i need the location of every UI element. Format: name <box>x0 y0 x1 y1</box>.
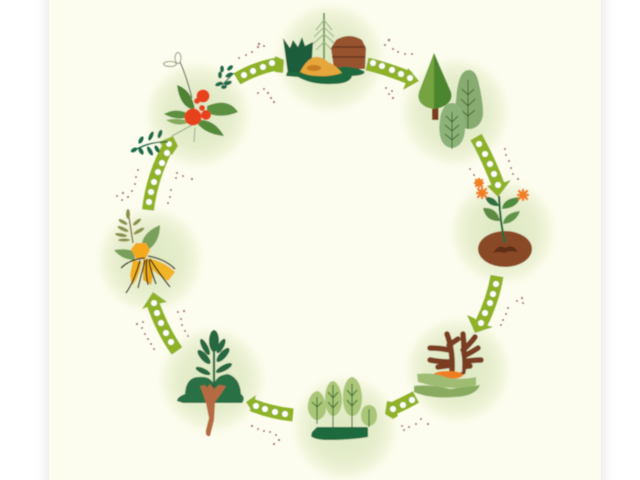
red berries <box>184 90 211 126</box>
front tree <box>439 103 465 148</box>
green leaves <box>142 225 160 250</box>
dark lines <box>121 256 175 293</box>
stage glow: grove <box>287 370 403 480</box>
petals <box>130 260 142 285</box>
stage glow: bark <box>400 312 516 428</box>
leaves <box>195 330 233 377</box>
grass <box>283 37 313 74</box>
stem <box>213 336 215 388</box>
icon: three trees <box>418 53 483 149</box>
arrow 6 <box>246 395 293 417</box>
trunk <box>432 108 438 120</box>
decorative dots <box>116 39 524 445</box>
icon: seedling with orange flowers <box>475 179 532 267</box>
green folds <box>417 374 476 388</box>
orange powder <box>433 371 463 379</box>
stem <box>499 196 505 243</box>
mossy base <box>311 427 368 440</box>
icon: fern sprig left <box>130 129 168 156</box>
arrow 4 <box>467 276 499 333</box>
leaves <box>483 197 520 224</box>
hill <box>177 374 244 403</box>
icon: grove of trees <box>308 377 377 440</box>
stage glow: root <box>154 322 270 438</box>
icon: root with leaves <box>177 330 244 436</box>
arrow 2 <box>367 60 419 90</box>
root <box>200 384 226 436</box>
feather leaf <box>128 211 133 243</box>
icon: compost heap with grass, tree and barrel <box>283 13 366 84</box>
stage glow: trees <box>395 52 515 172</box>
arrow 5 <box>385 397 416 419</box>
twig <box>172 124 195 142</box>
mound <box>300 57 342 76</box>
soil <box>478 231 532 267</box>
trunks and veins <box>312 384 369 428</box>
inner bark light <box>457 351 462 372</box>
arrow 7 <box>142 292 177 351</box>
arrow 1 <box>237 56 284 79</box>
sapling <box>313 13 335 60</box>
stage glow: compost <box>270 0 390 118</box>
tree crowns <box>308 377 377 426</box>
orange flowers <box>475 179 528 200</box>
barrel <box>331 36 366 69</box>
icon: fern sprig top <box>215 64 234 89</box>
tendril <box>180 62 192 98</box>
icon: bark pile <box>414 334 481 397</box>
stage glow: berries <box>140 57 256 173</box>
back tree <box>455 70 483 129</box>
orange centre <box>131 243 150 259</box>
arrow 3 <box>476 137 511 197</box>
leaves <box>177 85 195 110</box>
icon: yellow flower <box>114 209 175 293</box>
stage glow: seedling <box>445 174 561 290</box>
icon: berries with leaves <box>164 52 238 142</box>
arrow 8 <box>146 136 178 210</box>
bark branches <box>430 334 481 372</box>
conifer <box>418 53 434 109</box>
stage glow: flower <box>92 202 208 318</box>
base <box>286 67 364 84</box>
